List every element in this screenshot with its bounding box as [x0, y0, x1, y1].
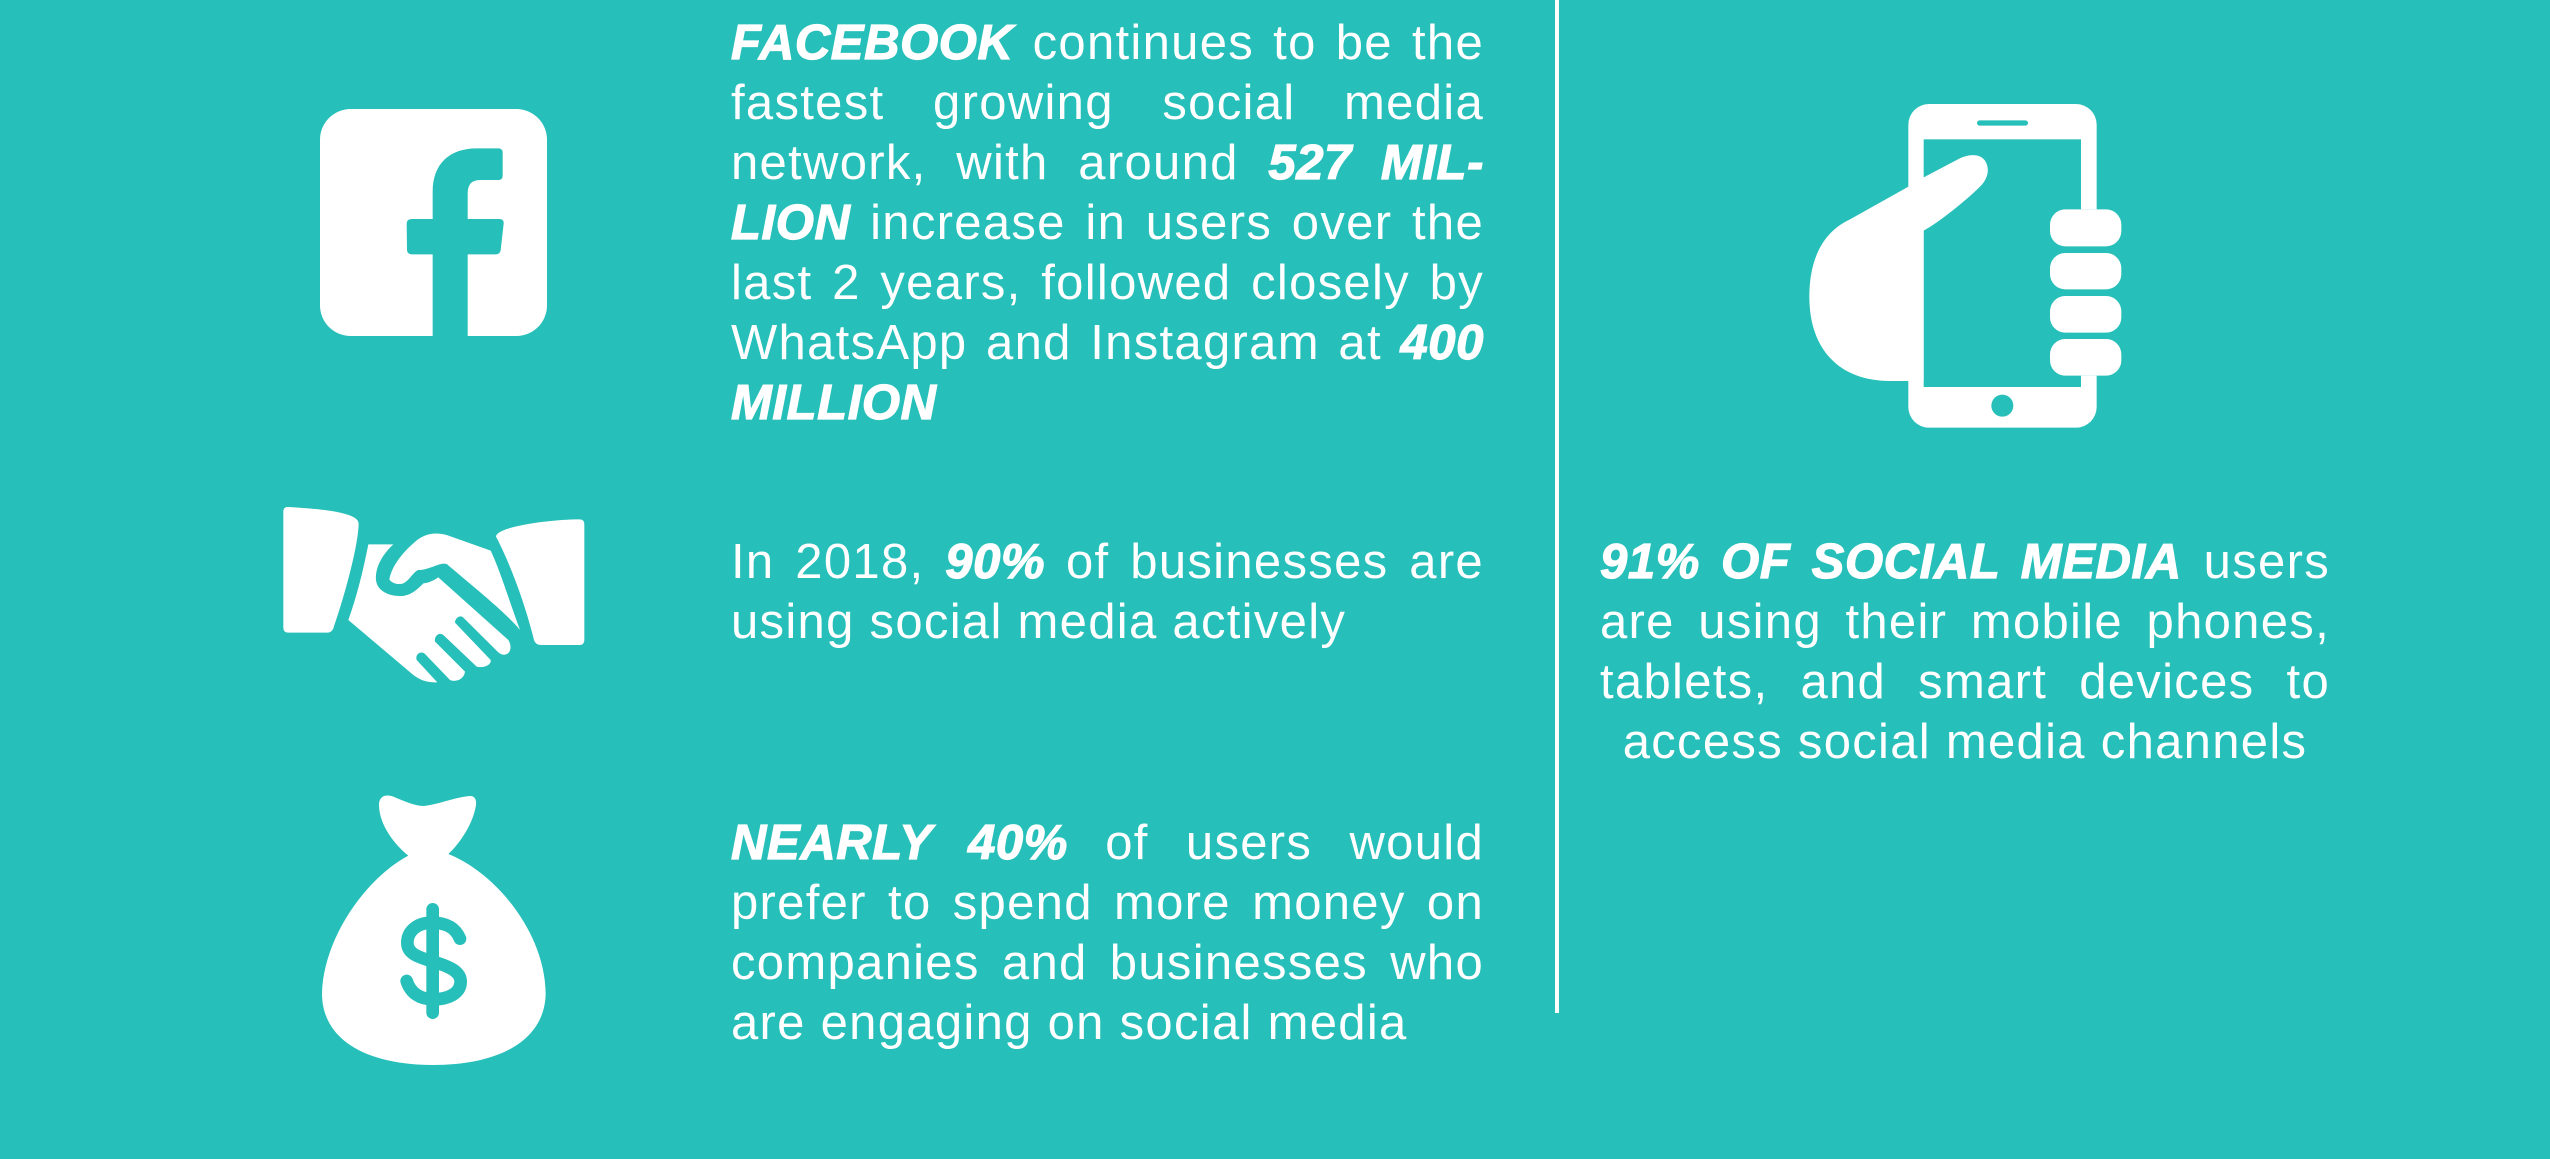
text: facebook growth: fastest growing social media	[731, 76, 1484, 130]
icon: handshake	[283, 507, 584, 682]
text: facebook growth: WhatsApp and Instagram at 400	[731, 316, 1484, 370]
text: mobile access: 91% OF SOCIAL MEDIA users	[1600, 535, 2330, 589]
text: facebook growth: FACEBOOK continues to be the	[731, 16, 1484, 70]
text: spending preference: companies and businesses who	[731, 936, 1484, 990]
text: facebook growth	[731, 16, 1484, 430]
icon: facebook logo	[320, 109, 547, 336]
text: facebook growth: network, with around 527 MIL-	[731, 136, 1484, 190]
text: mobile access: are using their mobile phones,	[1600, 595, 2330, 649]
text: spending preference: prefer to spend more money on	[731, 876, 1484, 930]
text: facebook growth: MILLION	[731, 376, 937, 430]
text: spending preference	[731, 816, 1484, 1050]
text: businesses using social media: In 2018, 90% of businesses are	[731, 535, 1484, 589]
text: facebook growth: LION increase in users over the	[731, 196, 1484, 250]
icon: money bag	[322, 796, 546, 1065]
icon: phone in hand	[1809, 104, 2122, 428]
text: spending preference: NEARLY 40% of users would	[731, 816, 1484, 870]
text: mobile access	[1600, 535, 2330, 769]
text: spending preference: are engaging on social media	[731, 996, 1408, 1050]
text: mobile access: tablets, and smart devices to	[1600, 655, 2330, 709]
text: facebook growth: last 2 years, followed closely by	[731, 256, 1484, 310]
text: mobile access: access social media channels	[1623, 715, 2307, 769]
text: businesses using social media: using social media actively	[731, 595, 1346, 649]
divider line	[1555, 0, 1559, 1013]
text: businesses using social media	[731, 535, 1484, 649]
